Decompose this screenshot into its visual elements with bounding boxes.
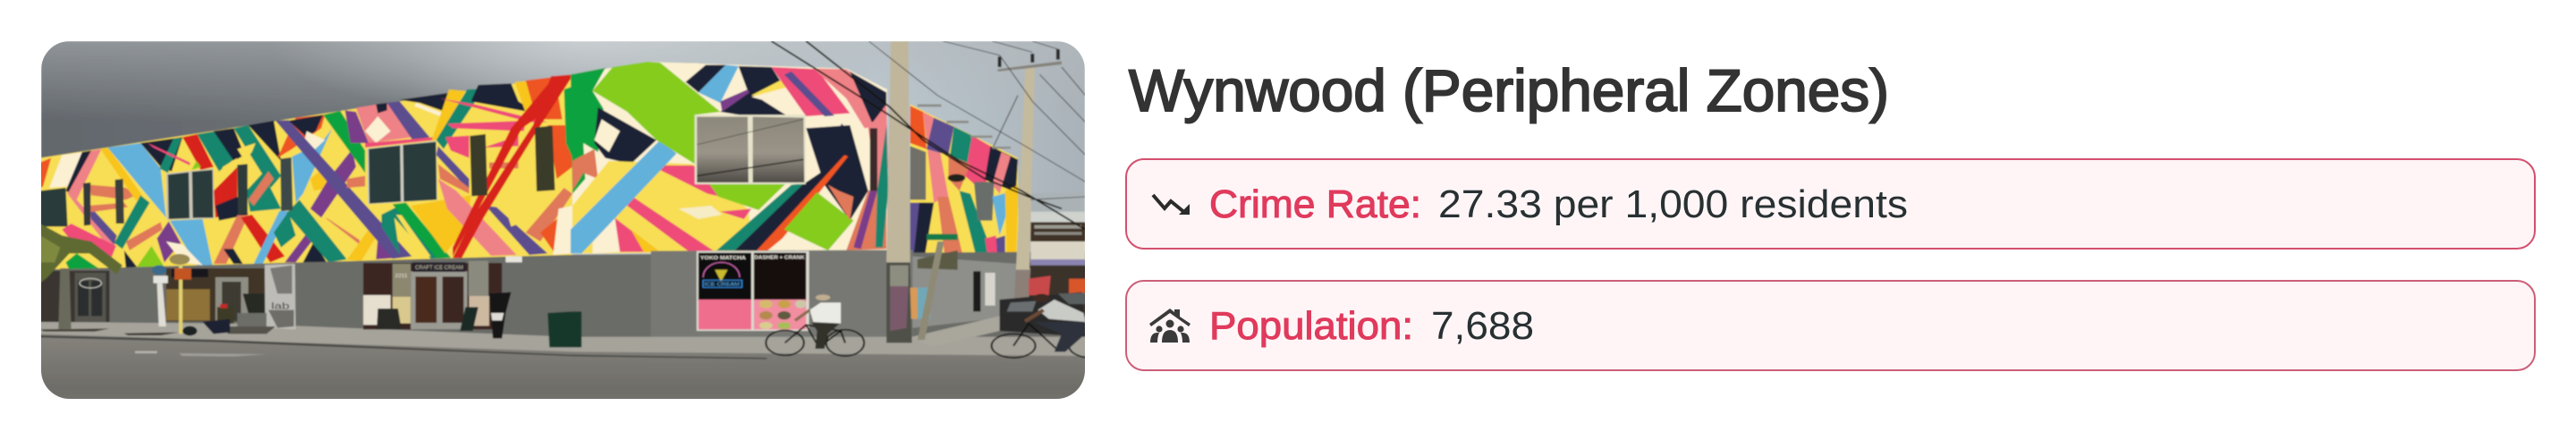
label: crime rate: Crime Rate:	[1209, 182, 1421, 226]
value: population: 7,688	[1431, 304, 1534, 348]
mural: corner section	[571, 62, 1019, 264]
cyclists	[766, 294, 1113, 358]
palm tree, bench and street signs	[40, 224, 275, 335]
storefronts	[40, 257, 572, 347]
sky	[41, 41, 1085, 265]
storefronts: 2211	[395, 274, 408, 279]
title: Wynwood (Peripheral Zones)	[1129, 57, 1889, 123]
photo: Wynwood mural building	[41, 41, 1085, 399]
icon: trending down arrow	[1153, 195, 1190, 215]
icon: house with people	[1149, 309, 1191, 343]
corner window	[695, 114, 806, 184]
value: crime rate: 27.33 per 1,000 residents	[1438, 182, 1908, 226]
utility poles and wires	[771, 41, 1085, 270]
storefronts: CRAFT ICE CREAM	[415, 264, 463, 271]
poster windows and corner ground floor	[572, 212, 1085, 347]
ground floor: walls, sidewalk and road	[41, 249, 1085, 399]
poster windows and corner ground floor: DASHER + CRANK	[754, 256, 805, 260]
label: population: Population:	[1209, 304, 1413, 348]
windows	[83, 126, 555, 225]
storefronts: lab	[271, 301, 290, 311]
poster windows and corner ground floor: ICE CREAM	[705, 283, 740, 287]
card: crime rate	[1126, 159, 2535, 249]
poster windows and corner ground floor: YOKO MATCHA	[700, 256, 746, 261]
card: population	[1126, 281, 2535, 370]
wing stripes	[911, 106, 1019, 262]
mural: left section	[40, 74, 572, 270]
